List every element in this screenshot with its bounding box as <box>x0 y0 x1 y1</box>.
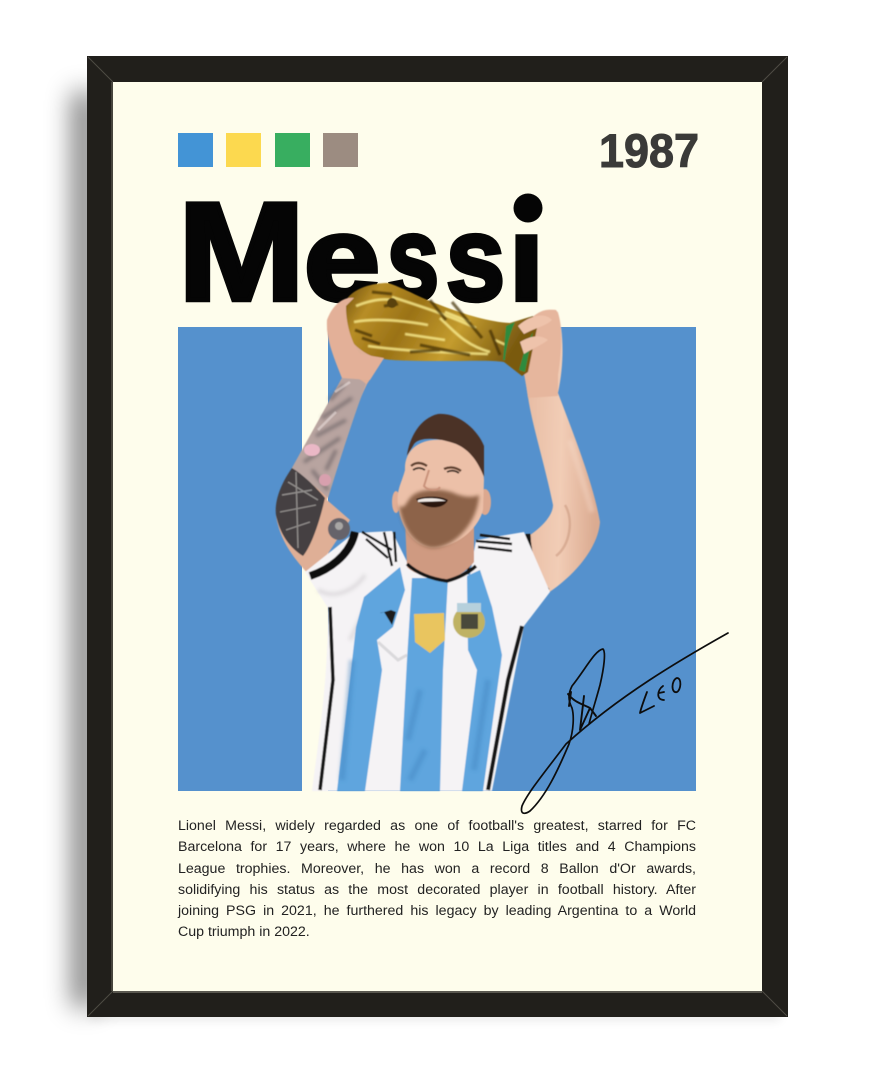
signature <box>521 633 728 813</box>
nose <box>424 470 440 490</box>
right raised arm <box>522 310 600 593</box>
blue stripes <box>337 567 405 791</box>
jersey body <box>305 531 550 791</box>
title: i <box>509 192 544 326</box>
blue panel right <box>328 327 696 791</box>
biography text: Barcelona for 17 years, where he won 10 La Liga titles and 4 Champions <box>178 839 696 855</box>
colour swatches <box>178 133 358 167</box>
biography text <box>178 818 696 940</box>
left raised arm with tattoos <box>276 300 384 578</box>
sponsor mark <box>380 610 396 625</box>
biography text: joining PSG in 2021, he furthered his legacy by leading Argentina to a World <box>178 903 696 919</box>
face <box>398 440 484 548</box>
right hand fingers <box>518 315 552 354</box>
side piping <box>320 607 333 790</box>
paper background <box>113 82 762 991</box>
right hand <box>520 310 561 398</box>
biography text: solidifying his status as the most decorated player in football history. After <box>178 882 696 898</box>
frame shadow <box>72 92 98 1007</box>
title <box>178 173 550 330</box>
poster frame <box>87 56 788 1017</box>
left hand gripping trophy <box>327 298 384 380</box>
world cup trophy <box>345 283 537 376</box>
neck and collar <box>405 520 474 580</box>
title: e <box>304 192 380 326</box>
mouth <box>416 496 448 507</box>
title: s <box>446 192 505 326</box>
gold badge <box>414 613 445 653</box>
title: s <box>387 192 439 326</box>
eyes <box>411 463 461 471</box>
biography text: Cup triumph in 2022. <box>178 924 310 940</box>
title: M <box>178 173 305 330</box>
blue panel left <box>178 327 302 791</box>
biography text: League trophies. Moreover, he has won a record 8 Ballon d'Or awards, <box>178 860 696 876</box>
beard <box>399 490 479 548</box>
federation crest <box>453 603 485 638</box>
player photo <box>276 283 600 791</box>
hair <box>407 414 484 477</box>
biography text: Lionel Messi, widely regarded as one of football's greatest, starred for FC <box>178 818 696 834</box>
year: 1987 <box>599 124 699 177</box>
ears <box>392 491 400 513</box>
head <box>392 414 491 548</box>
